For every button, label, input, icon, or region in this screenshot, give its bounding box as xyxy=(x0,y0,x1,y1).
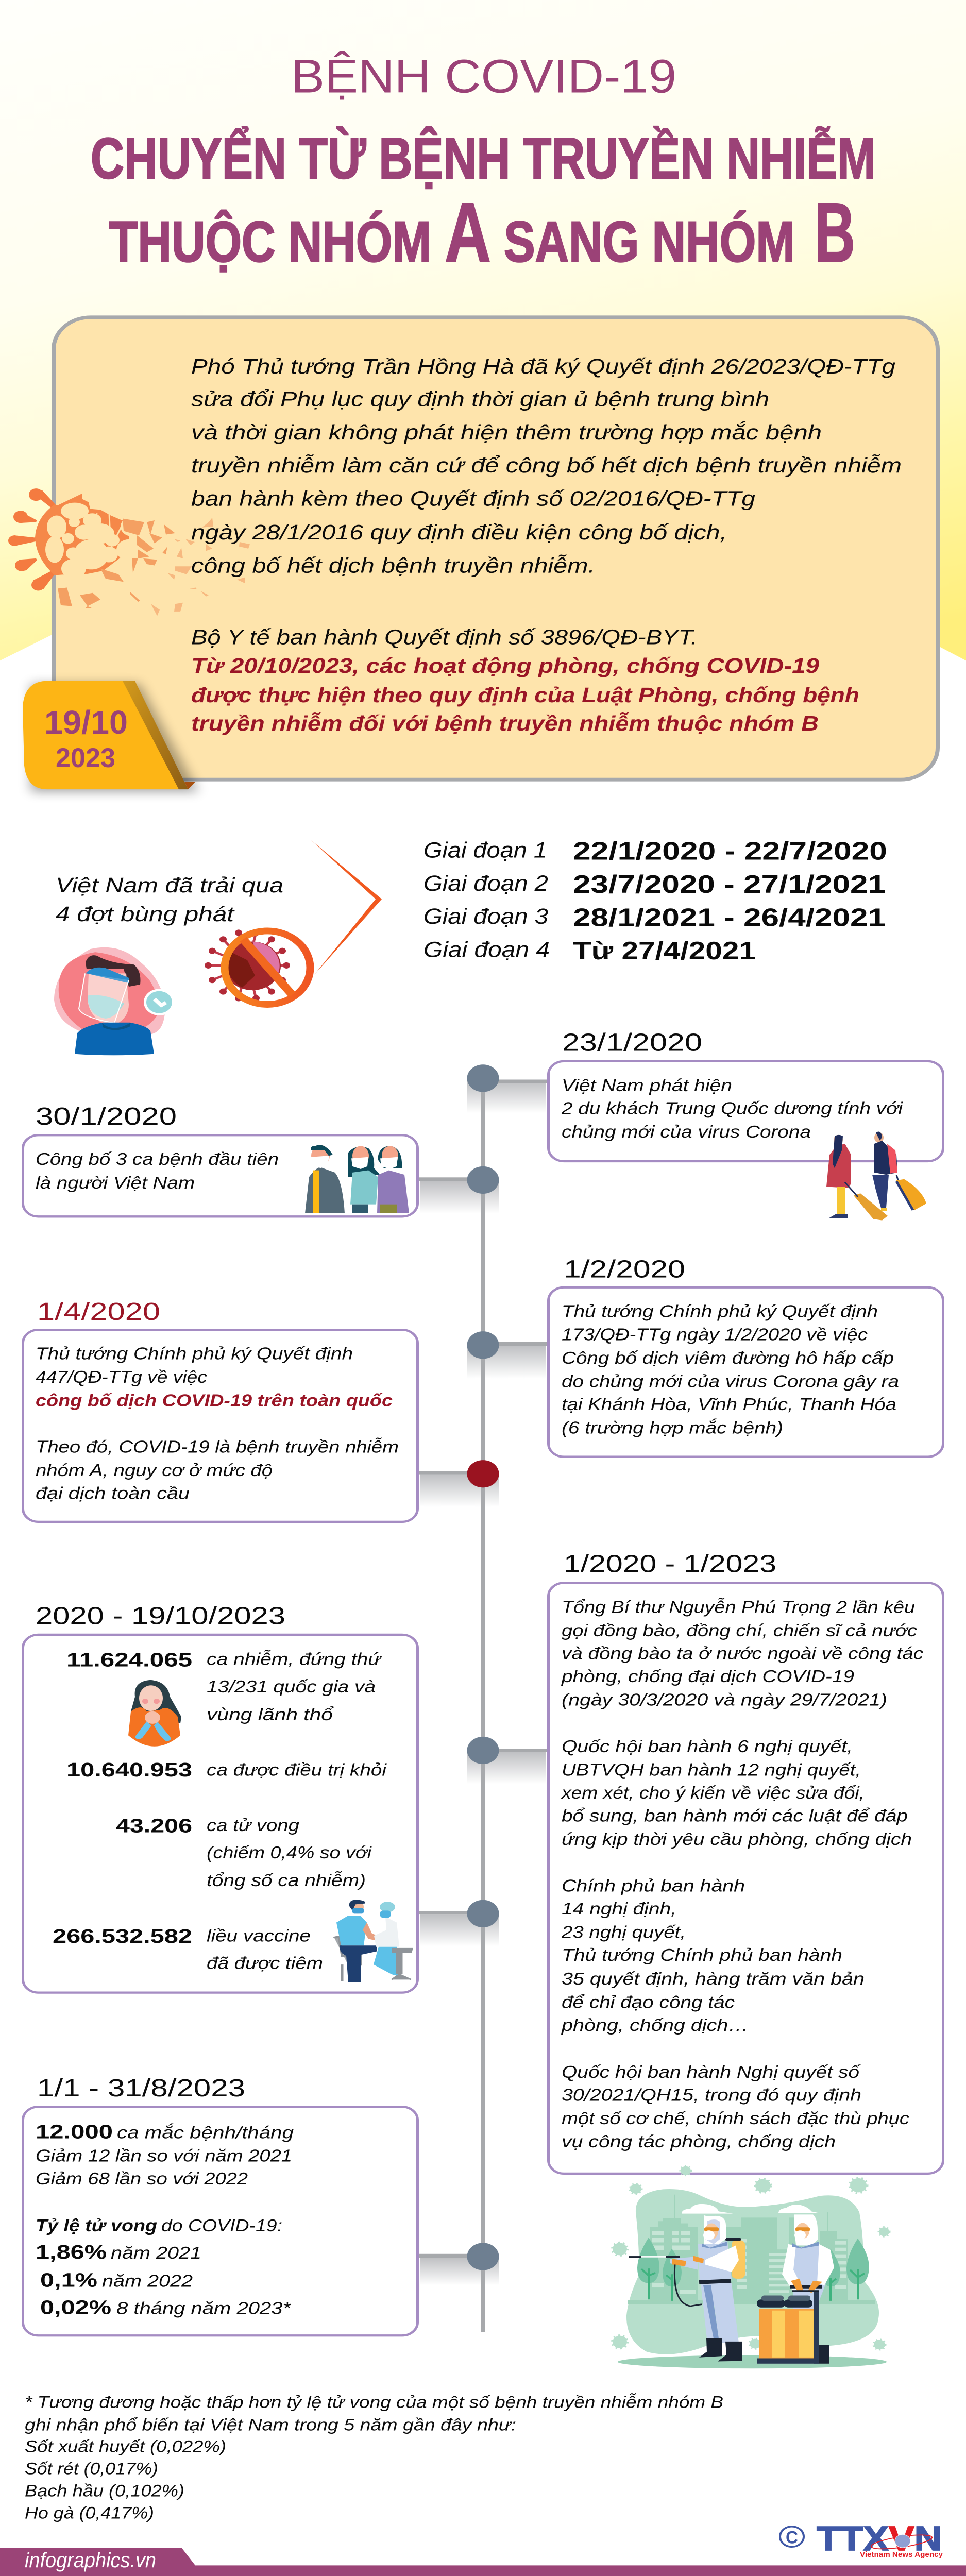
period 3: 28/1/2021 - 26/4/2021 xyxy=(573,904,886,932)
party leader text: phòng, chống đại dịch COVID-19 xyxy=(561,1667,854,1686)
mortality text: năm 2022 xyxy=(102,2271,193,2291)
card text: chủng mới của virus Corona xyxy=(562,1122,811,1141)
government text: 23 nghị quyết, xyxy=(561,1922,686,1942)
intro paragraph 2: được thực hiện theo quy định của Luật Phòng, chống bệnh xyxy=(191,684,859,707)
title xyxy=(91,50,876,280)
footnote: Sốt rét (0,017%) xyxy=(25,2459,158,2478)
panel: 23/1/2020 xyxy=(548,1029,943,1221)
title line 3: B xyxy=(815,185,855,280)
card box xyxy=(548,1287,943,1457)
icon: virus with prohibition ring xyxy=(205,929,310,1005)
worker with sprayer xyxy=(629,2214,745,2361)
panel: 1/2/2020 xyxy=(548,1256,943,1457)
ground xyxy=(618,2355,887,2368)
stat: vaccine doses: 266.532.582 xyxy=(53,1925,192,1947)
mortality text xyxy=(36,2216,292,2318)
national assembly text: ứng kịp thời yêu cầu phòng, chống dịch xyxy=(562,1829,912,1849)
period 4 xyxy=(423,937,756,965)
intro paragraph 1: ban hành kèm theo Quyết định số 02/2016/QĐ-TTg xyxy=(191,487,755,511)
card text xyxy=(562,1301,899,1437)
government text: để chỉ đạo công tác xyxy=(562,1992,735,2012)
resolution text: một số cơ chế, chính sách đặc thù phục xyxy=(562,2109,909,2128)
stat: vaccine doses: đã được tiêm xyxy=(207,1953,323,1973)
background gradient xyxy=(0,0,966,660)
panel: 2020 - 19/10/2023 xyxy=(23,1602,417,1993)
title line 3: A xyxy=(445,185,491,280)
card text: nhóm A, nguy cơ ở mức độ xyxy=(36,1461,273,1480)
card box xyxy=(23,1635,417,1993)
node 1/4/2020 xyxy=(467,1460,499,1487)
intro paragraph 1 xyxy=(191,355,902,578)
intro paragraph 1: công bố hết dịch bệnh truyền nhiễm. xyxy=(191,554,595,578)
title line 3 xyxy=(109,185,855,280)
resolution text: Quốc hội ban hành Nghị quyết số xyxy=(562,2062,861,2081)
intro paragraph 1: sửa đổi Phụ lục quy định thời gian ủ bệnh trung bình xyxy=(191,387,769,411)
agency name: Vietnam News Agency xyxy=(860,2551,943,2559)
stat: deaths: 43.206 xyxy=(116,1815,192,1837)
panel: introduction xyxy=(8,317,938,779)
icon: disinfection workers xyxy=(613,2166,889,2368)
city skyline xyxy=(628,2195,875,2304)
panel box xyxy=(54,317,938,779)
card text: Công bố dịch viêm đường hô hấp cấp xyxy=(562,1348,894,1367)
mortality text: 8 tháng năm 2023* xyxy=(116,2298,292,2318)
footnote: ghi nhận phổ biến tại Việt Nam trong 5 năm gần đây như: xyxy=(25,2415,516,2434)
stat: deaths: tổng số ca nhiễm) xyxy=(207,1871,366,1890)
period 4: Giai đoạn 4 xyxy=(423,937,550,962)
footnote xyxy=(25,2393,723,2522)
resolution text: vụ công tác phòng, chống dịch xyxy=(562,2131,836,2151)
party leader text: và đồng bào ta ở nước ngoài về công tác xyxy=(562,1643,923,1663)
card text: là người Việt Nam xyxy=(36,1173,195,1192)
footnote: Ho gà (0,417%) xyxy=(25,2503,154,2522)
card text: Thủ tướng Chính phủ ký Quyết định xyxy=(562,1301,878,1321)
government text: 14 nghị định, xyxy=(562,1899,676,1918)
title line 3: SANG NHÓM xyxy=(504,209,795,274)
party leader text xyxy=(561,1597,923,1709)
clouds xyxy=(682,2204,820,2214)
stat: infections: 13/231 quốc gia và xyxy=(207,1677,376,1696)
panel: 1/4/2020 xyxy=(23,1298,417,1522)
period 2: Giai đoạn 2 xyxy=(423,871,548,895)
period 1: Giai đoạn 1 xyxy=(423,838,547,862)
wordmark: TTXVN xyxy=(817,2519,942,2558)
card text: Việt Nam phát hiện xyxy=(562,1075,732,1095)
card text: 447/QĐ-TTg về việc xyxy=(36,1367,207,1386)
card text xyxy=(561,1075,903,1141)
card box xyxy=(23,1135,417,1216)
resolution text xyxy=(562,2062,909,2151)
node 30/1/2020 xyxy=(467,1166,499,1194)
website: infographics.vn xyxy=(25,2549,156,2572)
stat: deaths xyxy=(116,1815,372,1890)
period 3: Giai đoạn 3 xyxy=(423,904,548,928)
icon: three masked people xyxy=(305,1145,409,1213)
date text: 19/10 xyxy=(44,704,128,741)
card box xyxy=(23,2107,417,2335)
government text: Thủ tướng Chính phủ ban hành xyxy=(562,1945,842,1965)
mortality text: 0,02% xyxy=(40,2296,111,2318)
card text: 2 du khách Trung Quốc dương tính với xyxy=(561,1098,903,1118)
monthly cases text xyxy=(36,2121,294,2188)
icon: travellers xyxy=(826,1131,926,1221)
national assembly text: xem xét, cho ý kiến về việc sửa đổi, xyxy=(561,1783,865,1802)
date: 1/4/2020 xyxy=(37,1298,160,1326)
trees xyxy=(637,2238,869,2286)
icon: sick woman xyxy=(128,1680,181,1747)
intro paragraph 1: Phó Thủ tướng Trần Hồng Hà đã ký Quyết định 26/2023/QĐ-TTg xyxy=(191,355,895,378)
date: 1/2/2020 xyxy=(564,1256,685,1283)
date: 1/1 - 31/8/2023 xyxy=(37,2075,245,2102)
globe xyxy=(870,2532,933,2552)
government text: phòng, chống dịch… xyxy=(561,2015,749,2035)
arrow: chevron xyxy=(311,840,382,975)
stat: infections: vùng lãnh thổ xyxy=(207,1705,334,1724)
icon: vaccination xyxy=(334,1900,412,1982)
node 23/1/2020 xyxy=(467,1064,499,1092)
date tag xyxy=(23,681,198,792)
intro paragraph 1: truyền nhiễm làm căn cứ để công bố hết dịch bệnh truyền nhiễm xyxy=(191,454,902,477)
mortality text: năm 2021 xyxy=(111,2243,201,2263)
intro paragraph 1: ngày 28/1/2016 quy định điều kiện công bố dịch, xyxy=(191,521,727,544)
footnote: Bạch hầu (0,102%) xyxy=(25,2481,184,2500)
card text xyxy=(36,1149,279,1192)
intro paragraph 2: truyền nhiễm đối với bệnh truyền nhiễm thuộc nhóm B xyxy=(191,711,819,735)
date: 1/2020 - 1/2023 xyxy=(564,1550,776,1578)
national assembly text xyxy=(561,1736,912,1849)
card box xyxy=(23,1330,417,1522)
date: 2020 - 19/10/2023 xyxy=(36,1602,285,1630)
text: four outbreaks xyxy=(56,874,283,926)
card text xyxy=(36,1344,399,1503)
intro paragraph 2: Bộ Y tế ban hành Quyết định số 3896/QĐ-BYT. xyxy=(191,625,698,649)
small viruses xyxy=(613,2166,889,2349)
period 1: 22/1/2020 - 22/7/2020 xyxy=(573,837,887,866)
node 2020 - 19/10/2023 xyxy=(467,1900,499,1927)
stat: vaccine doses: liều vaccine xyxy=(207,1926,311,1945)
period 2: 23/7/2020 - 27/1/2021 xyxy=(573,871,886,899)
stat: infections: ca nhiễm, đứng thứ xyxy=(207,1649,382,1669)
government text xyxy=(561,1876,865,2035)
footer bar xyxy=(0,2548,966,2576)
panel: 30/1/2020 xyxy=(23,1103,417,1216)
card text: Theo đó, COVID-19 là bệnh truyền nhiễm xyxy=(36,1437,399,1456)
logo: TTXVN xyxy=(780,2519,943,2559)
timeline xyxy=(418,1064,548,2332)
panel: 1/2020 - 1/2023 xyxy=(548,1550,943,2174)
national assembly text: bổ sung, ban hành mới các luật để đáp xyxy=(562,1806,908,1825)
stat: recoveries xyxy=(66,1759,387,1781)
card text: (6 trường hợp mắc bệnh) xyxy=(562,1418,783,1437)
monthly cases text: Giảm 68 lần so với 2022 xyxy=(36,2169,248,2188)
title line 1: BỆNH COVID-19 xyxy=(291,50,676,103)
period 3 xyxy=(423,904,886,932)
stat: vaccine doses xyxy=(53,1925,323,1973)
card text: 173/QĐ-TTg ngày 1/2/2020 về việc xyxy=(562,1325,868,1344)
intro paragraph 1: và thời gian không phát hiện thêm trường hợp mắc bệnh xyxy=(191,421,822,444)
monthly cases text: Giảm 12 lần so với năm 2021 xyxy=(36,2146,292,2165)
text: four outbreaks: 4 đợt bùng phát xyxy=(56,903,235,926)
stat: deaths: ca tử vong xyxy=(207,1815,299,1835)
party leader text: (ngày 30/3/2020 và ngày 29/7/2021) xyxy=(562,1690,887,1709)
card box xyxy=(548,1583,943,2174)
intro paragraph 2: Từ 20/10/2023, các hoạt động phòng, chống COVID-19 xyxy=(191,654,820,677)
card text: Thủ tướng Chính phủ ký Quyết định xyxy=(36,1344,353,1363)
year text: 2023 xyxy=(56,743,115,773)
mortality text: Tỷ lệ tử vong xyxy=(36,2216,157,2235)
card text: Công bố 3 ca bệnh đầu tiên xyxy=(36,1149,279,1169)
card text: tại Khánh Hòa, Vĩnh Phúc, Thanh Hóa xyxy=(562,1395,896,1414)
card text: công bố dịch COVID-19 trên toàn quốc xyxy=(36,1391,393,1410)
icon: dissolving virus xyxy=(8,488,250,616)
copyright mark: C xyxy=(786,2527,798,2547)
date: 30/1/2020 xyxy=(36,1103,177,1130)
mortality text: do COVID-19: xyxy=(161,2216,282,2235)
government text: Chính phủ ban hành xyxy=(562,1876,745,1895)
stat: recoveries: 10.640.953 xyxy=(66,1759,192,1781)
government text: 35 quyết định, hàng trăm văn bản xyxy=(562,1969,865,1988)
icon: person with face shield xyxy=(54,947,175,1055)
party leader text: gọi đồng bào, đồng chí, chiến sĩ cả nước xyxy=(562,1620,917,1640)
stat: deaths: (chiếm 0,4% so với xyxy=(207,1843,372,1862)
national assembly text: Quốc hội ban hành 6 nghị quyết, xyxy=(562,1736,853,1756)
list: outbreak periods xyxy=(423,837,887,965)
intro paragraph 2 xyxy=(191,625,859,735)
national assembly text: UBTVQH ban hành 12 nghị quyết, xyxy=(562,1760,861,1780)
sprayer tanks xyxy=(757,2290,829,2364)
footnote: * Tương đương hoặc thấp hơn tỷ lệ tử vong của một số bệnh truyền nhiễm nhóm B xyxy=(25,2393,723,2412)
footnote: Sốt xuất huyết (0,022%) xyxy=(25,2437,226,2456)
node 1/1 - 31/8/2023 xyxy=(467,2243,499,2270)
monthly cases text: 12.000 xyxy=(36,2121,113,2143)
text: four outbreaks: Việt Nam đã trải qua xyxy=(56,874,283,897)
stat: recoveries: ca được điều trị khỏi xyxy=(207,1760,387,1780)
card box xyxy=(548,1061,943,1161)
worker with tanks xyxy=(782,2214,834,2349)
resolution text: 30/2021/QH15, trong đó quy định xyxy=(562,2085,861,2105)
panel: 1/1 - 31/8/2023 xyxy=(23,2075,417,2335)
period 4: Từ 27/4/2021 xyxy=(573,937,756,965)
card text: do chủng mới của virus Corona gây ra xyxy=(562,1371,899,1391)
title line 3: THUỘC NHÓM xyxy=(109,209,431,274)
period 1 xyxy=(423,837,887,866)
stat: infections: 11.624.065 xyxy=(66,1649,192,1671)
period 2 xyxy=(423,871,886,899)
copyright mark xyxy=(780,2527,804,2547)
party leader text: Tổng Bí thư Nguyễn Phú Trọng 2 lần kêu xyxy=(562,1597,915,1617)
stat: infections xyxy=(66,1649,382,1724)
node 1/2/2020 xyxy=(467,1331,499,1359)
mortality text: 0,1% xyxy=(40,2269,97,2291)
monthly cases text: ca mắc bệnh/tháng xyxy=(117,2123,294,2142)
mortality text: 1,86% xyxy=(36,2241,107,2263)
card text: đại dịch toàn cầu xyxy=(36,1483,190,1503)
node 1/2020 - 1/2023 xyxy=(467,1737,499,1764)
date: 23/1/2020 xyxy=(562,1029,702,1057)
